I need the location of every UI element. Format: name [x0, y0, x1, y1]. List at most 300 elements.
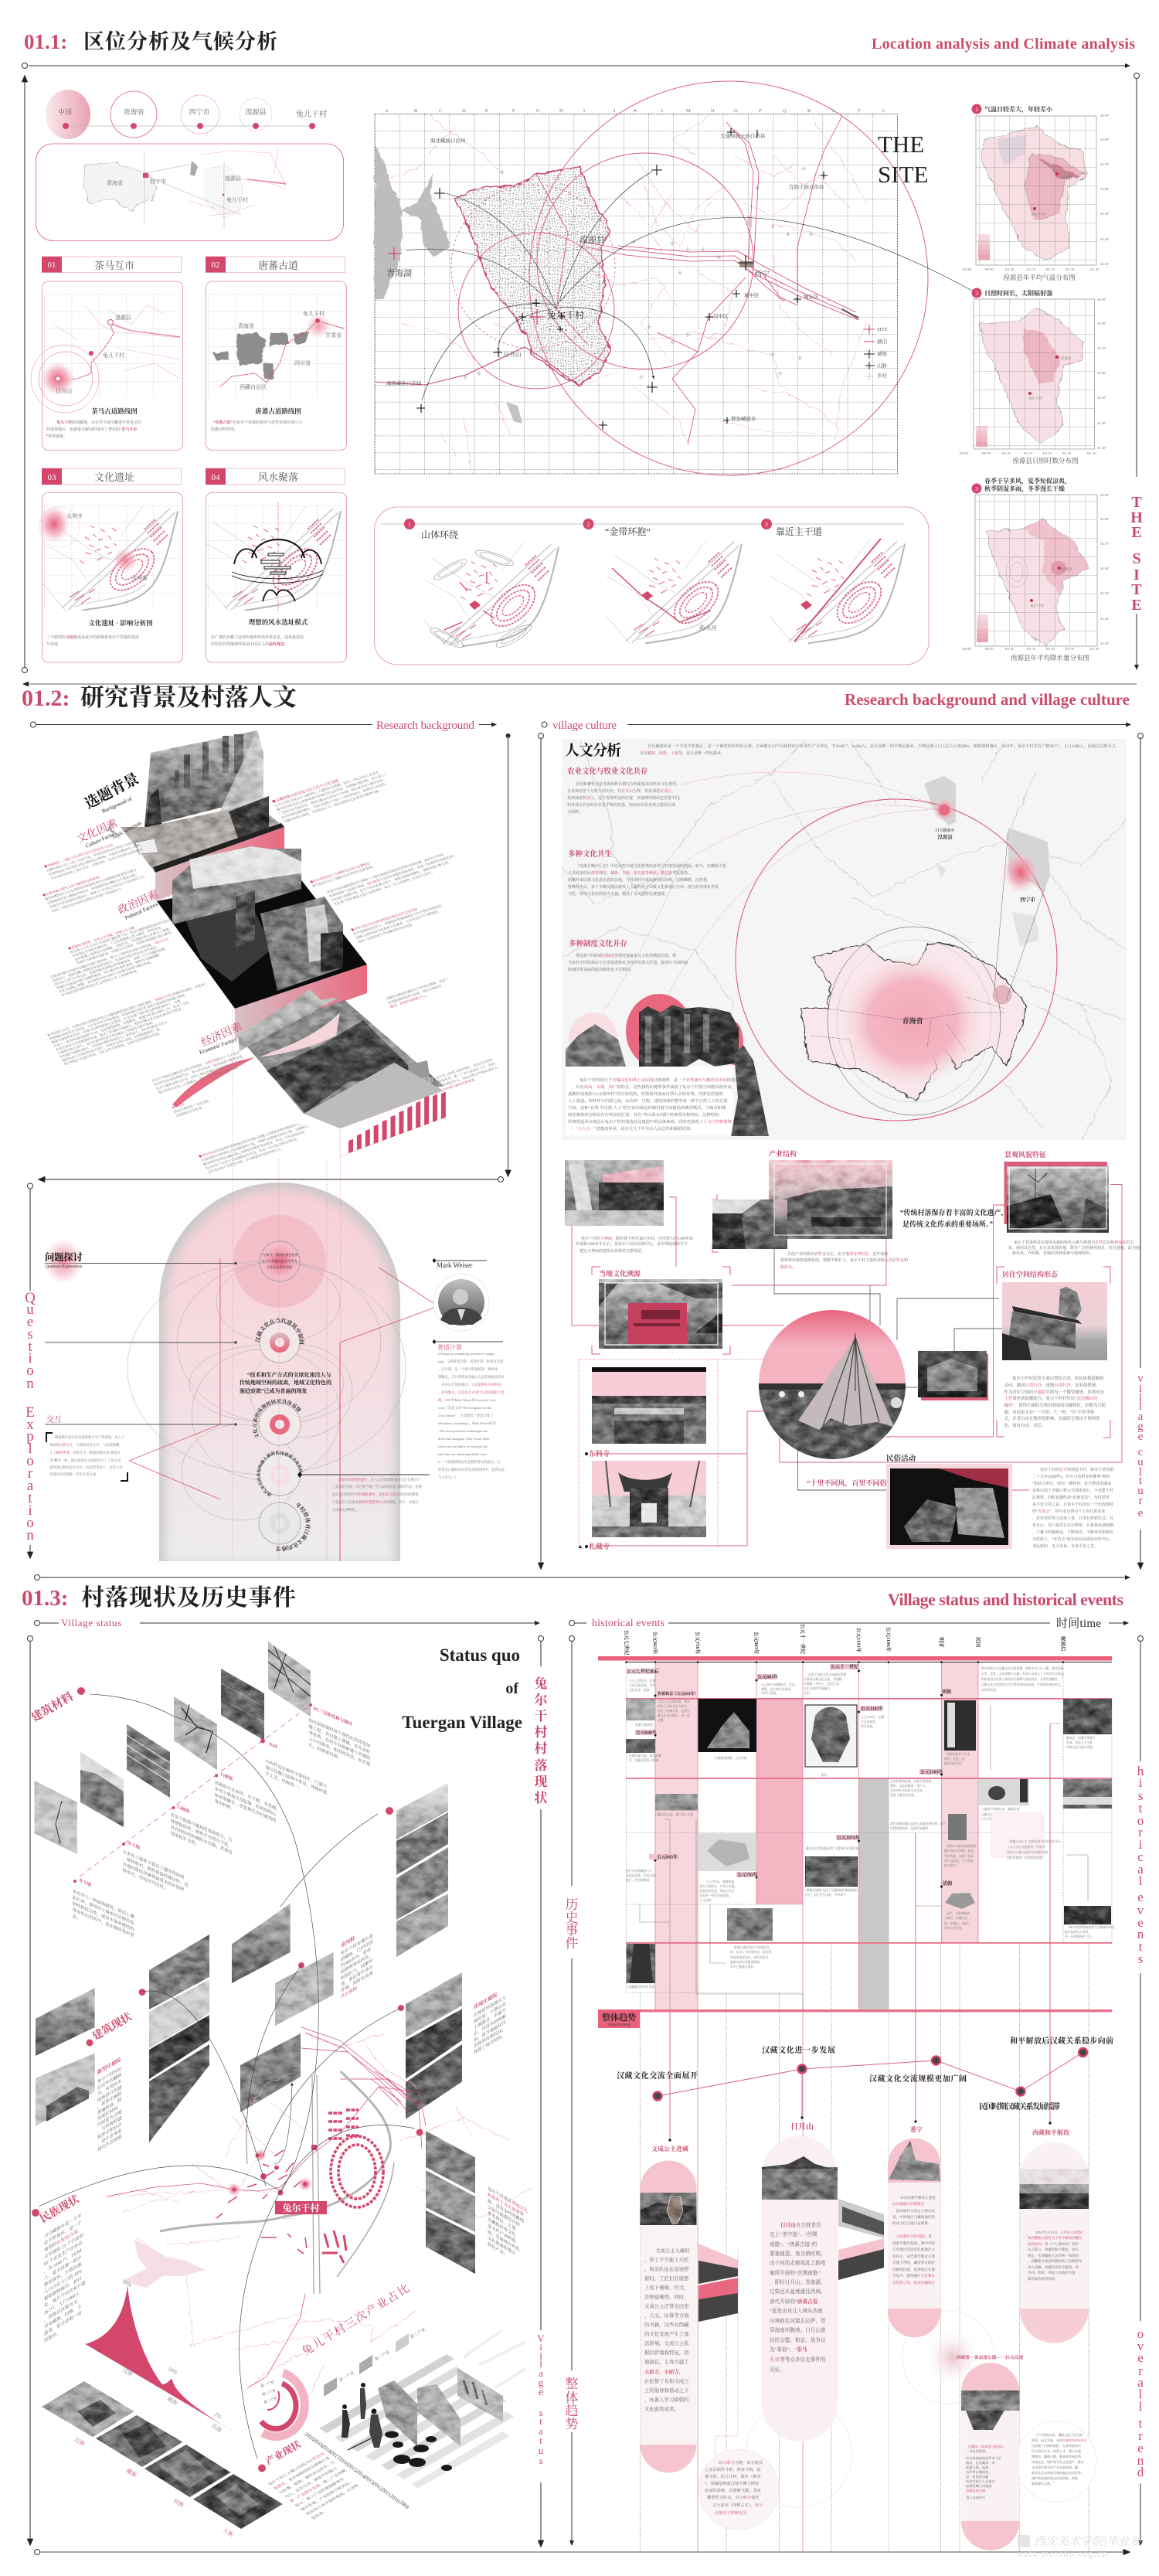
text: ethnic status: 农半牧地区，是一个 — [44, 2219, 82, 2247]
circular text: quote: 吸收现代文明。” — [1032, 2481, 1055, 2486]
colored period columns — [655, 1662, 698, 2010]
heading: 02 唐蕃古道: 唐蕃古道 — [258, 260, 298, 271]
timeline tiny notes: 积极推进各民族之间的相互理解与团结进步，共同发展繁荣。 — [981, 1677, 1061, 1681]
photo: old house — [918, 1351, 988, 1400]
panel: card 02 tang-tibet road map: 四川省 — [294, 359, 311, 366]
status quo title: Tuergan Village — [402, 1713, 522, 1732]
top bars — [598, 1656, 1112, 1660]
text: landscape: 兔尔干村落所处在建筑风貌的特色元素与规划为自然以及精神追求的主 — [1014, 1240, 1134, 1245]
capsule: 高速公路 — [957, 2354, 1024, 2550]
tags and notes: 公元1074年 — [837, 1835, 860, 1841]
section 01.1 title: 区位分析及气候分析 — [83, 30, 277, 53]
capsule: 高速公路: ，具有里程碑。 — [966, 2448, 988, 2454]
text block: 普适计算 — [433, 1339, 505, 1480]
materials text blocks: 木材 — [269, 1741, 277, 1751]
pink horizontal bars — [598, 1698, 1112, 2012]
text: cultural tourism — [488, 2185, 528, 2270]
panel: card 04 feng shui: 居住的自然地理环境是中国古人的最终观念。 — [211, 641, 288, 647]
text block: multiple cultures: 多种文化共生 — [568, 849, 613, 859]
map legend — [864, 325, 888, 380]
map place labels — [386, 132, 824, 422]
capsule: 番字: 番字 — [910, 2125, 923, 2133]
grid letters: E — [485, 108, 488, 114]
timeline tiny notes: 明朝时期茶马互市 — [947, 1752, 970, 1756]
capsule: 番字: 。 — [892, 2287, 896, 2292]
text: residential space: 走向，随同自然行沙，逐渐自南行沙，富有韵律感。 — [1004, 1382, 1100, 1388]
panel: card 02 tang-tibet road map: 唐蕃古道路线图 — [255, 407, 301, 415]
circular text: quote: 族文化正以更加开放的姿态走向世界。 — [1032, 2470, 1084, 2475]
legend squares: 第二产业 — [373, 2349, 391, 2363]
rotated text: economy commentary: 商品交换促进了文化交流 — [172, 1098, 210, 1114]
timeline tiny notes: 经济文化发展。 — [944, 1926, 965, 1930]
decorative trend circles — [698, 2311, 1096, 2530]
node: material question: 文化元素的体现如何更具体易懂 — [252, 1399, 301, 1439]
text: folk customs — [1032, 1467, 1114, 1549]
text block: technology note: 设计把这里的不同时期的事件，技术的与设计情况的的整体， — [332, 1492, 422, 1497]
text block: 交互: 交互 — [46, 1414, 62, 1424]
node: grey question — [258, 1502, 311, 1552]
text: new courtyard: 现代生活需要 — [97, 2133, 121, 2153]
vertical label: 整体趋势: 整体趋势 — [566, 2377, 578, 2431]
arch quote: 渐趋衰微”已成为普遍的现象 — [240, 1387, 308, 1394]
village culture frame: village culture — [552, 720, 617, 732]
rotated text: economy commentary: 繁荣，形成贸易集散中心。 — [389, 992, 430, 1009]
capsule: 文成公主进藏: ，和亲队伍在沿途停 — [644, 2265, 689, 2272]
materials text blocks: 梁以及檐口装饰中常见，体现村落 — [265, 1764, 327, 1796]
label: 札藏寺 — [579, 1542, 610, 1550]
text: new courtyard: ，与传统的建 — [97, 2115, 121, 2135]
text: residential space: 藏风”，使得庄廊院呈现出明显的汉藏特征，形制为合院 — [1004, 1402, 1106, 1408]
text block: technology note: 方法相关事物进。 — [332, 1507, 359, 1513]
isometric background stack — [75, 730, 446, 1157]
text: industry status: 旅游业，基本种植结构为青稞小麦 — [272, 2455, 332, 2491]
panel: card 02 tang-tibet road map: 甘肃省 — [325, 332, 342, 339]
text: folk customs: 举日后，其户依次在农历祭祀，并祈祷风调雨顺 — [1032, 1523, 1114, 1528]
capsule: 番字: 汗青地区的边民民族地区文 — [892, 2247, 936, 2252]
timeline tiny notes: 藏贸易的交往 — [944, 1761, 962, 1765]
timeline tiny notes: 设置管辖机构，促进贸易繁荣。 — [890, 1826, 931, 1830]
circular text: 大昭寺: 汉地寺宇形制无异。 — [715, 2510, 751, 2516]
county area dotted — [454, 166, 611, 385]
watermark: xafa.meishu.org.cn — [1018, 2548, 1108, 2559]
text: industry status: 马铃薯、油菜。畜牧业以养羊、牛 — [277, 2459, 337, 2495]
text block: technology note: 了技术的空间，同已使当地广告人员明显设立地的信息。把握 — [332, 1484, 423, 1489]
photo cluster connectors — [572, 1184, 1122, 1546]
rotated text: economy commentary — [150, 976, 504, 1175]
heading: 建筑现状: 建筑现状 — [90, 2009, 134, 2043]
materials text blocks: 手工艺，风貌统一。 — [265, 1770, 302, 1792]
rotated text: politics commentary left: 青海地区的经济社会发展，人民生活水平明显提高，传统村落在现代化进程中面临新的机遇与挑战， — [48, 992, 189, 1041]
capsule: 高速公路: 进一步促进西藏 — [966, 2474, 989, 2479]
capsule: 文成公主进藏: ，带了不少能工巧匠 — [644, 2256, 689, 2263]
capsule: 西藏和平解放: 规定，实现藏族人民的统一和团结 — [1028, 2253, 1079, 2258]
timeline tiny notes: 地方政府投入资金， — [1065, 1930, 1091, 1934]
grid letters: M — [686, 108, 691, 114]
section 01.3 divider line — [34, 1575, 1130, 1580]
photo: residential form: 居住空间结构形态 — [1002, 1270, 1059, 1278]
climate map 3: rainfall: 36.30° — [1100, 641, 1110, 645]
pink connector lines — [129, 1258, 438, 1561]
text block: institutions: 各民族不同的政治制度虽相处地遍多元文化的地面方面，相 — [576, 953, 676, 958]
rotated text: politics commentary left: 文化交流随之频繁，各民族的风俗习惯在这里相互渗透与融合发展， — [57, 959, 155, 994]
rotated text: culture and economy commentary right: 汉藏民族在这片土地上交流互动，形成多样的文化传统与风俗习惯， — [45, 838, 142, 873]
text block: farming and herding: 在青海有着十分悠久的历史。以日月山为界，其东部是农业区， — [567, 788, 675, 794]
rotated text: economy commentary: 沿线聚落的形成与发展，带动当地经济 — [386, 983, 444, 1006]
text: tree and courtyard descriptions: 约300余年，是村 — [341, 1946, 371, 1969]
watermark — [1018, 2535, 1143, 2559]
text: new courtyard: 中，采用砖木 — [97, 2077, 121, 2098]
rotated text: culture and economy commentary right: 文化遗产保护被纳入地方发展规划，吸引了社会各界的广泛关注与参与。 — [332, 869, 436, 907]
heading: 问题探讨: 问题探讨 — [45, 1251, 83, 1263]
text: tree and courtyard descriptions: 要民居，主要以夯 — [474, 2000, 506, 2025]
rotated text: culture and economy commentary right: 汉藏文化相互吸收，共同构成了这一地区独特的文化景观与精神内涵。 — [282, 788, 382, 824]
heading: 建筑材料: 建筑材料 — [29, 1690, 76, 1724]
text block: institutions: 多种制度文化并存 — [569, 939, 628, 948]
heading: 01 茶马互市 — [42, 257, 181, 272]
text: ethnic status: 典型的农牧结合部。 — [44, 2226, 82, 2254]
rotated text: politics commentary left: 青海作为唐蕃交通要道，其地位日益重要，沿线村落逐渐兴起与繁荣。 — [75, 929, 175, 965]
timeline tiny notes: 吐蕃王朝崩溃， — [635, 1723, 656, 1727]
timeline tiny notes: 公元793年，唐蕃和盟， — [706, 1880, 737, 1884]
materials text blocks: 大多夯土墙体主要以土壤夯筑而成 — [123, 1848, 185, 1880]
intro text: 日月藏族乡是一个半农半牧地区，是一个典型的农牧结合部。全乡辖有23个行政村95个农业生产合作社，共3340户，14284人，是全县唯一的少数民族乡，少数民族人口占总人口的49%。根据资料统计，2012年，兔尔干村共有户数367户，人口1460人，民族以汉族为主， — [647, 744, 1120, 749]
text block: village introduction: ，具有南高、水缓、田广的特点，这些独特的地理条件成就了兔尔干村落空间格局的形成， — [572, 1084, 736, 1090]
circular text: 大昭寺: 以大昭寺为例，该寺院其 — [719, 2459, 763, 2465]
rotated text: culture and economy commentary right: 民族自治区域政策的实行保障了少数民族地区的政治权利和发展机遇，政府对于传统 — [325, 852, 445, 895]
timeline tiny notes: “唐蕃会盟碑”记述了汉藏两族和睦相处的 — [805, 1888, 858, 1892]
circular text: quote: 保护和弘扬传统文化的同时，积极 — [1032, 2476, 1078, 2480]
heading: 02 唐蕃古道 — [206, 257, 345, 272]
panel: location map: 兔儿干村 — [226, 196, 248, 203]
text: residential space: 式，并受自由且地形的影响，庄廊院呈现出不规则形 — [1004, 1415, 1100, 1421]
grid letters: A — [385, 108, 389, 114]
portrait: Mark Weiser — [433, 1258, 489, 1331]
timeline tiny notes: 及赤岭一带贸易的局面， — [699, 1894, 732, 1897]
text: industry status: 村民收入水平逐步提高，生活明 — [304, 2483, 360, 2516]
arch quote: 传统地域空间的疏离，地域文化特色的 — [240, 1379, 331, 1387]
map place labels: 海南藏族自治州 — [386, 379, 422, 386]
minor roads — [107, 2033, 533, 2404]
watermark: 西安美术学院|毕业展 — [1034, 2535, 1143, 2548]
timeline tiny notes: 与汉文化相通，并有 — [629, 1683, 655, 1687]
location chain — [46, 90, 327, 139]
circular text: quote: 博物馆，整理古籍，继承和发展优秀 — [1032, 2454, 1081, 2459]
panel: cultural map: 日月藏族乡 — [935, 828, 955, 833]
vertical label: Village status: Village status — [537, 2333, 545, 2466]
panel: card 04 feng shui: 在广袤的青藏上这样的地形环境非常多见，追求最适宜 — [211, 635, 304, 640]
vertical label: 历史事件: 历史事件 — [566, 1897, 578, 1951]
climate map 2: sunshine: 36.70° — [1097, 346, 1106, 350]
map place labels: 城东区 — [804, 293, 819, 300]
panel: card 01 tea horse road map: 茶马古道路线图 — [91, 407, 138, 415]
materials text blocks: 石砌墙 — [177, 1803, 189, 1815]
materials text blocks: 之中有使用，使用较灵活，形式现 — [309, 1735, 371, 1768]
rotated text: culture and economy commentary right: 广泛的文化交流活动，使得汉藏文化在兔尔干村落一带长期共存与融合发展， — [277, 777, 387, 816]
year labels: 民国 — [975, 1637, 982, 1648]
climate map 2: sunshine: 100.95 — [981, 451, 991, 455]
label: THE SITE: THE — [878, 131, 924, 158]
overall trend tag: Overall trend — [607, 2023, 630, 2027]
timeline tiny notes: 旅游及研究的重要资源， — [730, 1960, 763, 1964]
climate map 3: rainfall: 36.60° — [1100, 567, 1110, 570]
overall trend tag: 整体趋势 — [602, 2012, 636, 2023]
timeline tiny notes: 吐蕃内部分裂，政权瓦解 — [629, 1754, 661, 1758]
trend line: 汉藏文化交流全面展开 — [617, 2071, 698, 2081]
ethnic area chart: 18% — [167, 2366, 178, 2376]
climate map 3: rainfall: 36.90° — [1100, 493, 1110, 497]
capsule: 文成公主进藏: 的书籍，这些对西藏 — [644, 2321, 689, 2328]
timeline tiny notes: 人口迁移。 — [699, 1898, 714, 1902]
text block: 普适计算: those that disappear. They weave them — [438, 1437, 490, 1441]
question exploration frame — [28, 1183, 32, 1558]
panel: cultural map — [562, 739, 1127, 1140]
ethnic photo labels — [73, 2436, 235, 2538]
text: cultural tourism: 源，具有多样的藏地 — [488, 2197, 524, 2224]
timeline table — [598, 1624, 1118, 2552]
rotated text: economy commentary: 集市贸易在历史上长期繁荣，带动了沿线村落的共同发展。 — [157, 1064, 242, 1095]
year labels: 公元1106年 — [885, 1627, 892, 1652]
curved arrows — [39, 1694, 415, 2459]
big site map — [375, 81, 972, 475]
timeline tiny notes: 西夏王国的文化交流融合时期 — [808, 1673, 847, 1676]
capsule: 西藏和平解放: 法的协议》签《十七条协议》把和 — [1028, 2241, 1079, 2247]
capsule: 西藏和平解放: 西藏和平解放 — [1032, 2129, 1069, 2136]
legend squares: 第三产业 — [409, 2326, 427, 2340]
text block: village introduction: 人工街道。四外环与内部之间，由农田、庄院，建筑围绕形整形成一种半自然人工的过渡 — [568, 1097, 728, 1104]
heading: 03 文化遗址: 文化遗址 — [94, 471, 134, 483]
layer titles: 选题背景 — [82, 769, 142, 812]
panel: siting factors: 山体环绕 — [421, 529, 458, 540]
text block: multiple cultures: 人员较多的民族特殊前，藏族、羊族、蒙古族等种族、撒拉族等民族等， — [568, 870, 692, 876]
dotted links — [603, 772, 944, 1013]
rotated text: politics commentary left: 此后唐蕃之间使臣往来频繁，会盟多次，为汉藏民族关系奠定了基础， — [73, 926, 173, 962]
location chain: 兔儿干村 — [296, 109, 327, 119]
climate map 2: sunshine: 湟源县日照时数分布图 — [1012, 457, 1079, 464]
text: tree and courtyard descriptions: 树冠巨大，枝繁叶 — [341, 1957, 373, 1982]
climate map 2: sunshine: 100.85 — [959, 451, 969, 455]
capsule: 文成公主进藏: 大昭寺、小昭寺， — [644, 2368, 684, 2376]
text: industry status: 较小，第三产业的旅游服务业 — [294, 2476, 346, 2508]
dashed materials axis — [80, 1705, 311, 1877]
text: tree and courtyard descriptions: 茂，象征着生命与 — [341, 1963, 373, 1988]
ethnic photo labels: 汉族 — [73, 2436, 87, 2448]
capsule: 番字: 学设中，使得地区文化教育 — [892, 2273, 936, 2278]
grid letters: L — [661, 108, 664, 114]
timeline tiny notes: 文成公主远嫁吐蕃，和亲 — [658, 1700, 690, 1703]
text block: institutions — [568, 939, 688, 972]
timeline tiny notes: 促进了唐蕃关系，也使汉 — [658, 1709, 690, 1713]
heading: 民俗活动: 民俗活动 — [886, 1454, 916, 1463]
timeline tiny notes — [626, 1666, 1118, 1989]
text: folk customs: ”相结合举行。组有一番特色，社火整体表演多 — [1032, 1481, 1111, 1486]
capsule: 文成公主进藏 — [640, 2145, 697, 2473]
quote: customs: “十里不同风，百里不同俗” — [807, 1479, 891, 1488]
circular text: quote: 传统文化，保护和开发文化遗产，推动 — [1032, 2459, 1084, 2464]
column dots — [625, 1661, 1064, 1887]
text: ethnic status: 民族乡。 — [44, 2329, 61, 2344]
year labels: 公元1103年 — [856, 1628, 862, 1653]
rotated text: culture and economy commentary right: 汉藏之间的经济文化联系日益紧密，人民生活水平不断提高。 — [354, 908, 442, 941]
node: culture question — [255, 1318, 304, 1363]
photo: temple gate — [565, 1160, 664, 1226]
text block: technology note — [297, 1472, 430, 1513]
layer titles: Topic selection — [110, 820, 143, 841]
climate map 3: rainfall: 秋季阴湿多雨，冬季漫长干燥 — [984, 485, 1065, 493]
panel: card 01 tea horse road map: 日月山 — [56, 387, 72, 394]
materials text blocks: 阳光板和钢材用于现代化的改造加 — [309, 1717, 371, 1749]
section 01.2 title: 01.2: — [22, 686, 70, 711]
rotated text: economy commentary: 农业与畜牧业相互补充，形成了稳定的地方经济结构与生活方式， — [155, 1057, 249, 1091]
heading: 04 风水聚落 — [206, 468, 345, 485]
climate map 3: rainfall: 兔尔干村 — [1030, 603, 1044, 608]
text block: 交互: 如何通过数码设计之中，的运营等设下，这是人们 — [49, 1465, 123, 1470]
capsule: 文成公主进藏: 文化蔚然成风。 — [644, 2405, 679, 2412]
panel: location map: 湟源县 — [225, 175, 241, 182]
text block: 普适计算: 们将自己编织到日常生活的结构中，直到无法 — [438, 1467, 505, 1472]
climate map 3: rainfall: 36.40° — [1100, 617, 1110, 621]
grid letters: N — [711, 108, 715, 114]
capsule: 西藏和平解放 — [1020, 2129, 1089, 2343]
capsule: 日月山: 及“茶盐”、“茶马 — [770, 2346, 807, 2353]
circular text: 大昭寺: 雕塑型式特点，有小昭寺情况 — [707, 2494, 759, 2500]
vertical label: overall trend: overall trend — [1137, 2326, 1144, 2479]
map legend: 城镇 — [877, 350, 887, 357]
bar chart — [348, 1090, 446, 1153]
text block: 普适计算: 普适计算 — [437, 1343, 462, 1351]
photo: temple building — [240, 2033, 301, 2112]
timeline tiny notes: 入藏使节相继往来，藏地发展 — [981, 1807, 1020, 1811]
grid letters: G — [536, 108, 540, 114]
tags and notes: 公元840年 — [636, 1730, 657, 1736]
panel: siting factors: 药水河 — [699, 624, 717, 631]
text: residential space: 态，富有自由、灵活。 — [1004, 1422, 1045, 1428]
tags and notes: 公元803年 — [757, 1674, 778, 1680]
timeline tiny notes: 人员与文化交流密切，村落中 — [1007, 1845, 1045, 1849]
timeline tiny notes: 进一步加强保护工作。 — [1065, 1935, 1094, 1938]
text: residential space: 作为居住空间的庄廊院实则为一个微型城堡，厚重的夯 — [1004, 1389, 1105, 1395]
trend line: 民国时期汉藏关系发展缓滞 — [979, 2101, 1060, 2112]
capsule: 文成公主进藏: ，吐蕃人学习唐朝的 — [644, 2396, 689, 2403]
climate map 1: temperature: 101.05 — [1004, 267, 1015, 271]
text: ethnic status: 根据资料统计，2012 — [44, 2275, 82, 2302]
layer titles: 政治因素 — [116, 888, 161, 917]
isometric year bands: 2009 — [398, 2499, 410, 2511]
materials text blocks: 料形式，村民世代沿用。 — [123, 1866, 168, 1892]
climate map 2: sunshine: 36.40° — [1097, 421, 1106, 425]
text: landscape: 体，使用其自然，且在其发展的地，既有广泛的使用场景，经过地貌，改为庭 — [1008, 1245, 1140, 1251]
circular text: 大昭寺 — [705, 2459, 763, 2516]
capsule: 西藏和平解放: ，西藏地方政府积极协助人民解放军 — [1028, 2258, 1083, 2264]
text: new courtyard: 空间更为合理 — [97, 2108, 121, 2129]
capsule: 西藏和平解放: 新的政治经济改革。 — [1028, 2276, 1059, 2282]
tags and notes: 清朝 — [943, 1880, 952, 1887]
text: new courtyard: ，新型庄廊院 — [97, 2090, 121, 2110]
grid letters: S — [832, 108, 835, 114]
central village map — [107, 2027, 533, 2404]
panel: siting factors — [374, 507, 929, 665]
climate map 3: rainfall: 36.50° — [1100, 591, 1110, 595]
vertical label: historical events: historical events — [1137, 1764, 1144, 1966]
text block: technology note: 空间的对话性的提升，让人员在地理的重点与定位重点于 — [338, 1477, 421, 1482]
heading: 人文分析: 人文分析 — [565, 741, 621, 759]
heading: 02 唐蕃古道: 02 — [212, 260, 219, 270]
panel: card 03 cultural sites: 与发展 — [46, 641, 58, 647]
timeline tiny notes: 和人员流动，社会发展 — [944, 1859, 974, 1863]
panel: location map: 青海省 — [107, 179, 123, 186]
research background frame: Research background — [376, 720, 474, 732]
timeline tiny notes: 唐蕃古道沿线有多处遗址存 — [734, 1945, 770, 1949]
ethnic area chart: 藏族 — [166, 2395, 179, 2407]
vertical label: Question Exploration: Question Exploration — [25, 1290, 36, 1543]
timeline tiny notes: 文化交流的发展融合， — [804, 1686, 833, 1690]
text block: 普适计算: 策略这，与计算机本身融入人们的地现实的环 — [438, 1374, 505, 1380]
climate map 3: rainfall: 100.85 — [962, 647, 972, 651]
rotated text: politics commentary left: 新中国成立以后，民族区域自治制度的实行为藏族聚居地区提供了制度保障，“西部大开发”战略的实施进一步促进了 — [46, 981, 209, 1038]
rotated text: economy commentary: 汉藏贸易路线穿越兔尔干村周边地带，促进了 — [384, 976, 450, 1002]
isometric year bands: 2010 — [389, 2493, 401, 2505]
text: new courtyard: 新型庄廊院 — [97, 2056, 121, 2076]
text block: multiple cultures: 特殊等先后，多个少数民族民族风土大量的发了回教文化和地区分布，地方的外部有外贸 — [568, 884, 719, 890]
rotated text: economy commentary: 繁荣的贸易使得汉藏民族之间的经济联系更加紧密，促进了共同富裕发展， — [202, 1128, 308, 1167]
timeline tiny notes: 藏区的社会体制，促进 — [944, 1849, 974, 1853]
text block: farming and herding: 农业和畜牧业是青海两种长期共存的最基本的经济文化类型， — [576, 781, 680, 787]
text block: 普适计算: 与之区分。”） — [438, 1475, 458, 1480]
heading: 01 茶马互市: 01 — [48, 260, 56, 270]
capsule: 日月山: 出境前往河源去拉萨，贯 — [770, 2317, 826, 2325]
capsule: 高速公路: 经济发展与人员流动 — [966, 2479, 996, 2484]
text: ethnic status: ，民族以汉族为主， — [44, 2295, 82, 2323]
capsule: 高速公路: 加强西藏与内地的 — [966, 2483, 992, 2489]
capsule: 西藏和平解放: 正式签订。西藏得和平解放，协议 — [1028, 2247, 1079, 2252]
text: folk customs: ，村里老幼男人前来上香，并举行祭祀仪式。其 — [1032, 1516, 1114, 1521]
text: tree and courtyard descriptions: 庄廊是河湟地区主 — [474, 1994, 506, 2019]
capsule: 番字: 化特点，宋代番学教育主要 — [892, 2254, 936, 2259]
quote: 是传统文化传承的重要场所。” — [902, 1220, 994, 1228]
vertical pink guide lines — [233, 1009, 341, 1561]
circular text: quote: 文化事业和文化产业全面发展。藏 — [1032, 2465, 1078, 2469]
photo: residential form — [997, 1267, 1110, 1438]
node: pale question — [257, 1451, 303, 1496]
layer titles: Culture Factors — [85, 830, 118, 849]
village label: 兔尔干村 — [282, 2202, 320, 2214]
timeline tiny notes: 后，汉藏关系趋于缓和。 — [629, 1758, 661, 1762]
timeline tiny notes: 汉藏文化交流，藏人进入汉地 — [655, 1812, 694, 1816]
timeline tiny notes: 传佛教一并传入，包括艺术、 — [804, 1682, 841, 1686]
photo: local culture — [592, 1267, 730, 1354]
timeline tiny notes: 藏文化走向融合，进一步 — [658, 1713, 690, 1717]
rotated text: economy commentary: 明显改善，第三产业比重逐步上升，经济 — [437, 1061, 497, 1084]
circular text: 大昭寺: 征而的影响，其他翘飞翼，龙凤 — [705, 2487, 761, 2493]
text: cultural tourism: 各类项目，主要 — [488, 2210, 515, 2232]
capsule: 文成公主进藏: 的文化发展产生了深 — [644, 2330, 689, 2337]
materials text blocks: 多见于院落与建筑的基础部分，石 — [171, 1811, 233, 1843]
capsule: 番字: 宋廷制定具体措施，发 — [896, 2234, 932, 2239]
donut chart: 第一产业 — [260, 2379, 275, 2389]
text block: farming and herding: 农业文化与牧业文化共存 — [566, 767, 648, 776]
text block: technology note: 只是成为人们来看把场所遗留的方式的情报。其中，实现方 — [332, 1499, 419, 1505]
text block: 普适计算: ，本身这计算的模式；人们能够在任何时间 — [438, 1382, 501, 1387]
climate map 1: temperature: 101.15 — [1026, 267, 1036, 271]
panel: siting factors: “金带环抱” — [605, 526, 651, 537]
text: residential space: 土外墙形成防御能力。兔尔干村村居民“汉居藏而居 — [1004, 1395, 1098, 1401]
quote: “传统村落保存着丰富的文化遗产， — [900, 1208, 1008, 1217]
qinghai province — [800, 927, 1028, 1115]
capsule: 番字: 经济文化交流日益频繁。 — [892, 2220, 932, 2226]
rotated text: culture and economy commentary right: 乡村振兴战略实施。兔尔干村在政策支持下，建筑风貌得到整治，基础设施不断完善。 — [330, 859, 453, 903]
section 01.2 title: 研究背景及村落人文 — [80, 684, 297, 711]
text: cultural tourism: 为藏族传统文化 — [488, 2216, 515, 2238]
layer titles: Economic Factors — [199, 1036, 238, 1056]
